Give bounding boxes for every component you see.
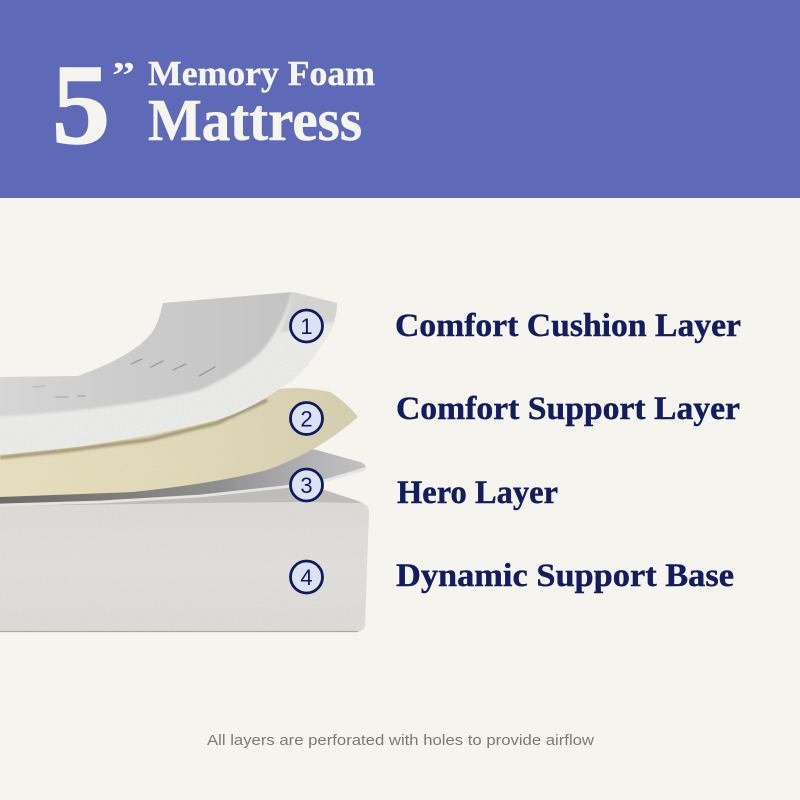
title: 5 inch: 5 <box>52 41 110 168</box>
perforation slits <box>33 359 215 397</box>
layer 2: comfort support layer <box>0 388 358 497</box>
marker 3 <box>290 469 322 501</box>
marker 4: 4 <box>300 565 313 590</box>
title: Mattress: Mattress <box>148 87 362 153</box>
label: hero layer: Hero Layer <box>397 475 558 511</box>
label: dynamic support base: Dynamic Support Base <box>396 558 734 594</box>
header banner <box>0 0 800 198</box>
marker 3: 3 <box>300 473 313 498</box>
title: inch mark: ” <box>112 55 135 97</box>
layer 4: dynamic support base <box>0 486 369 632</box>
label: comfort support layer: Comfort Support Layer <box>396 391 740 427</box>
layer 1: comfort cushion layer <box>0 288 340 455</box>
marker 2: 2 <box>300 406 313 432</box>
marker 4 <box>290 561 322 593</box>
footnote: All layers are perforated with holes to provide airflow <box>207 732 594 749</box>
top face <box>0 288 340 417</box>
label: comfort cushion layer: Comfort Cushion Layer <box>395 308 741 344</box>
marker 1: 1 <box>300 314 313 339</box>
marker 2 <box>290 402 322 434</box>
title: Memory Foam: Memory Foam <box>148 54 375 93</box>
side edge <box>0 292 337 455</box>
layer 3: hero layer <box>0 449 365 506</box>
marker 1 <box>290 310 322 342</box>
mattress illustration <box>0 288 369 632</box>
